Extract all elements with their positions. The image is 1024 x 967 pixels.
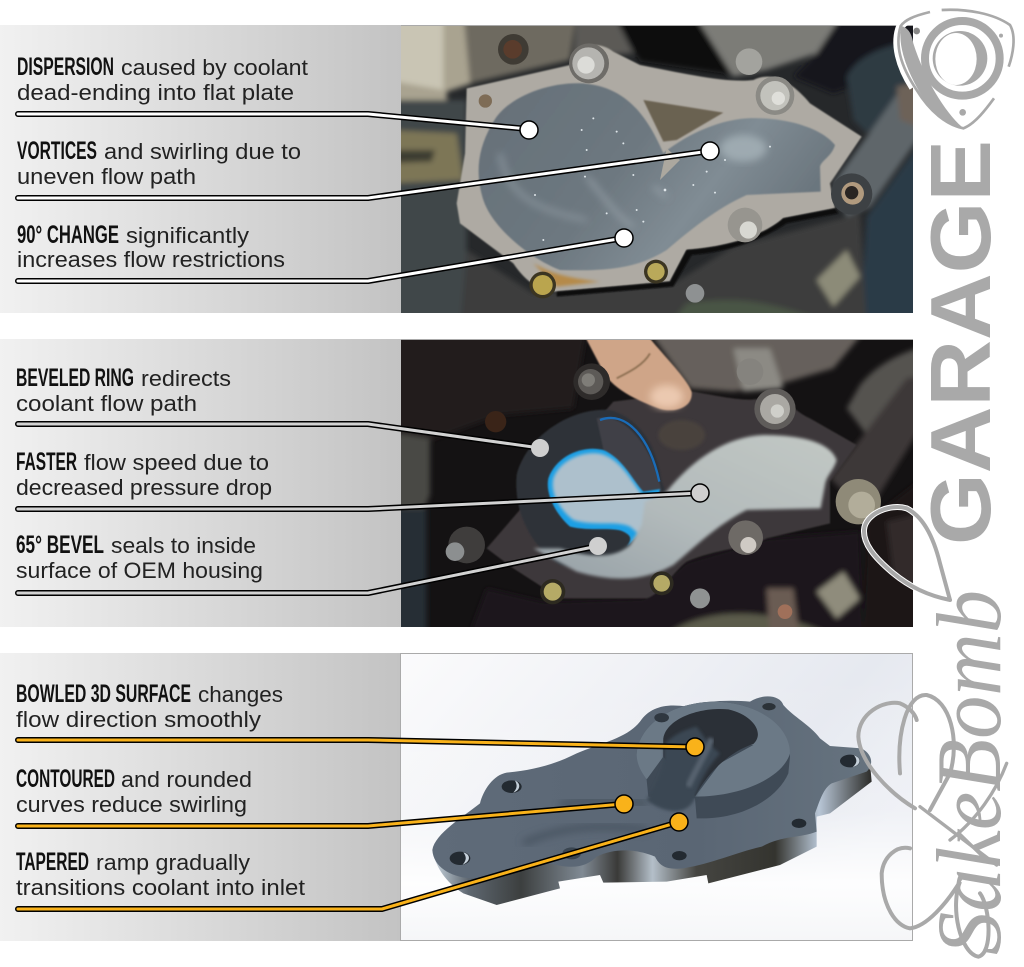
caption: vortices: uneven flow path (17, 164, 196, 189)
leader: 65 degree bevel (18, 537, 607, 593)
caption: bowled 3D surface: BOWLED 3D SURFACE (16, 680, 191, 708)
flange window (658, 420, 705, 450)
ramp shading (523, 827, 647, 843)
panel: beveled ring solution (0, 328, 927, 642)
leader: contoured (18, 795, 633, 826)
caption: beveled ring (16, 364, 231, 416)
caption: dispersion: dead-ending into flat plate (17, 80, 294, 105)
render: 3D model of cover plate (400, 653, 913, 941)
caption: faster: flow speed due to (84, 450, 269, 475)
plate top face (432, 696, 871, 878)
panel: 3D surface design (0, 653, 913, 941)
caption: faster: decreased pressure drop (16, 475, 272, 500)
bowl (663, 709, 758, 797)
logo flourishes (858, 507, 1007, 957)
callout leaders and markers (18, 424, 709, 593)
flange window (643, 100, 723, 142)
ring blue edge (600, 418, 659, 482)
leader: beveled ring (18, 424, 549, 457)
caption: vortices: VORTICES (17, 137, 97, 165)
caption: 90 degree change: significantly (126, 223, 249, 248)
caption: 90 degree change: 90° CHANGE (17, 221, 119, 249)
icon: rotor emblem (898, 10, 1014, 128)
caption background (0, 339, 401, 627)
caption: dispersion (17, 53, 308, 105)
gasket flange (457, 45, 862, 292)
caption: 65 degree bevel: surface of OEM housing (16, 558, 263, 583)
photo: stock cover plate with coolant flow (401, 25, 913, 313)
caption: beveled ring: coolant flow path (16, 391, 197, 416)
caption background (0, 653, 400, 941)
caption: tapered: ramp gradually (96, 850, 250, 875)
logo: SakeBomb Garage (858, 10, 1020, 957)
leader: faster (18, 484, 709, 509)
photo: beveled ring in housing with coolant flow (401, 339, 913, 627)
caption: 65 degree bevel (16, 531, 263, 583)
blue lit ring outlet (548, 449, 660, 547)
caption: vortices: and swirling due to (104, 139, 301, 164)
finger (585, 337, 692, 410)
housing flange (487, 392, 857, 598)
caption: contoured (16, 765, 252, 817)
bowl channel (647, 727, 720, 811)
caption: contoured: CONTOURED (16, 765, 115, 793)
leader: vortices (18, 142, 719, 198)
coolant pool (479, 83, 835, 270)
logo wordmark: SakeBomb: SakeBomb (918, 590, 1020, 955)
logo wordmark: GARAGE: GARAGE (914, 140, 1009, 545)
caption: faster (16, 448, 272, 500)
raised ring top (637, 702, 790, 797)
caption: tapered: transitions coolant into inlet (16, 875, 305, 900)
bolts (479, 34, 794, 303)
caption: vortices (17, 137, 301, 189)
caption: bowled 3D surface: flow direction smoothly (16, 707, 261, 732)
raised ring side (637, 702, 790, 818)
plate side wall (433, 763, 872, 905)
caption: faster: FASTER (16, 448, 77, 476)
ring recess (516, 409, 665, 565)
panel: flat plate problems (0, 13, 927, 327)
leader: dispersion (18, 114, 538, 139)
caption: tapered (16, 848, 305, 900)
caption: dispersion: caused by coolant (121, 55, 308, 80)
caption: dispersion: DISPERSION (17, 53, 114, 81)
caption: 90 degree change: increases flow restrictions (17, 247, 285, 272)
bracket eyelet (831, 173, 872, 215)
caption: bowled 3D surface: changes (198, 682, 283, 707)
callout leaders and markers (18, 114, 719, 281)
leader: 90 degree change (18, 229, 633, 281)
caption: 90 degree change (17, 221, 285, 272)
leader: tapered (18, 813, 688, 909)
leader: bowled surface (18, 738, 704, 756)
caption background (0, 25, 401, 313)
caption: 65 degree bevel: 65° BEVEL (16, 531, 104, 559)
callout leaders and markers (18, 738, 704, 909)
caption: beveled ring: BEVELED RING (16, 364, 134, 392)
mounting holes (450, 703, 860, 865)
caption: contoured: and rounded (121, 767, 252, 792)
caption: bowled 3D surface (16, 680, 283, 732)
caption: contoured: curves reduce swirling (16, 792, 247, 817)
bolts (446, 358, 881, 619)
caption: tapered: TAPERED (16, 848, 89, 876)
caption: beveled ring: redirects (141, 366, 231, 391)
milky coolant (533, 435, 837, 579)
caption: 65 degree bevel: seals to inside (111, 533, 256, 558)
